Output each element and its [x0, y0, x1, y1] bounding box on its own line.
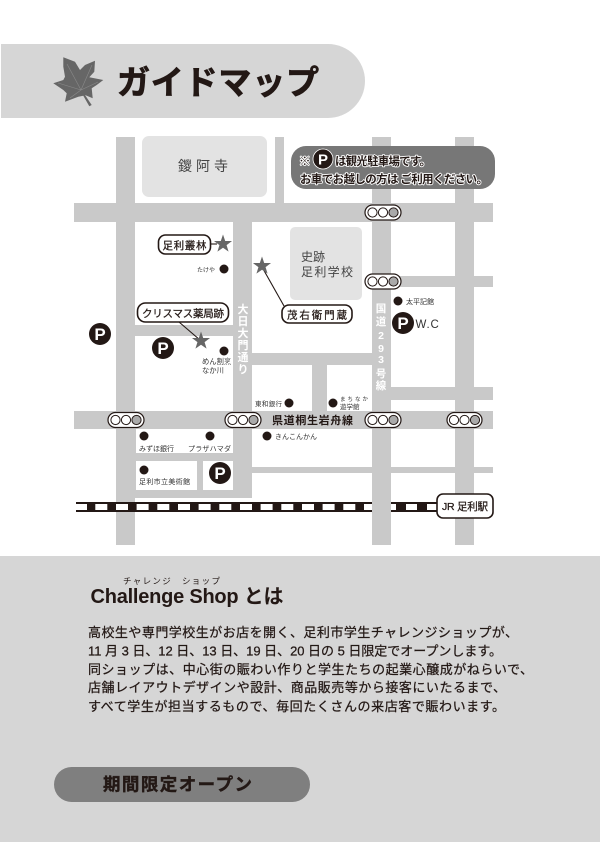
facility: Machinaka Yugakukan: [328, 396, 368, 411]
road label: Route 293: [376, 303, 387, 392]
bank: Mizuho: みずほ銀行: [139, 444, 174, 453]
title: ガイドマップ: [117, 64, 319, 101]
body text: 同ショップは、中心街の賑わい作りと学生たちの起業心醸成がねらいで、: [88, 662, 533, 677]
road label: Route 293: 道: [376, 315, 387, 328]
parking note: は観光駐車場です。: [335, 154, 431, 168]
station label: JR 足利駅: [442, 501, 488, 513]
landmark: Moemon-gura: 茂右衛門蔵: [287, 308, 348, 322]
road label: Daimon street: 日: [238, 315, 248, 328]
parking note: お車でお越しの方は ご利用ください。: [300, 172, 488, 186]
building: Bannaji temple: 鑁阿寺: [178, 158, 232, 174]
building: Ashikaga school: [290, 227, 362, 300]
facility: Machinaka Yugakukan: 遊学館: [340, 402, 360, 411]
road label: prefectural road: 県道桐生岩舟線: [272, 413, 353, 427]
shop: Kinkonkan: [262, 432, 317, 441]
shop: Takeya: たけや: [197, 266, 215, 274]
shop: Men Kappo Nakagawa: [202, 346, 231, 375]
shop: Taiheiki-kan: 太平記館: [406, 297, 434, 306]
road label: Daimon street: り: [238, 363, 248, 376]
panel: Challenge Shop: [0, 556, 600, 842]
road label: Route 293: 3: [378, 354, 384, 366]
body text: すべて学生が担当するもので、毎回たくさんの来店客で賑わいます。: [88, 699, 505, 714]
building: Ashikaga school: 史跡: [301, 249, 325, 264]
shop: Plaza Hamada: プラザハマダ: [188, 444, 231, 453]
parking and toilet: P: [397, 314, 409, 333]
parking note: [291, 146, 495, 189]
landmark: Christmas pharmacy: クリスマス薬局跡: [142, 307, 224, 320]
road label: Daimon street: 通: [238, 350, 248, 364]
section heading: Challenge Shop とは: [90, 586, 284, 608]
road label: Daimon street: 大: [238, 302, 248, 316]
bank: Towa: 東和銀行: [255, 399, 282, 408]
road label: Route 293: 2: [378, 330, 384, 342]
parking and toilet: [392, 312, 440, 334]
parking: [209, 462, 231, 484]
museum: 足利市立美術館: [139, 477, 190, 486]
landmark: Ashikaga Sorin: 足利叢林: [162, 239, 207, 252]
parking and toilet: W.C: [416, 319, 440, 331]
parking: [89, 323, 111, 345]
bank: Towa: [255, 398, 294, 408]
building: Bannaji temple: [142, 136, 267, 197]
shop: Taiheiki-kan: [394, 296, 434, 306]
traffic signal: [365, 274, 401, 289]
traffic signal: [108, 412, 144, 428]
traffic signal: [365, 205, 401, 220]
parking: [152, 337, 174, 359]
body text: 高校生や専門学校生がお店を開く、足利市学生チャレンジショップが、: [88, 625, 518, 640]
limited time pill: [54, 767, 310, 802]
body text: 店舗レイアウトデザインや設計、商品販売等から接客にいたるまで、: [88, 680, 506, 695]
parking: P: [94, 325, 106, 344]
road label: Route 293: 号: [376, 368, 386, 380]
road label: Route 293: 線: [376, 379, 387, 392]
limited time pill: 期間限定オープン: [103, 774, 252, 794]
facility: Machinaka Yugakukan: まちなか: [340, 396, 368, 403]
body text: 11 月 3 日、12 日、13 日、19 日、20 日の 5 日限定でオープンします。: [88, 644, 502, 658]
body text: [88, 625, 533, 714]
road label: Route 293: 9: [378, 343, 384, 355]
shop: Men Kappo Nakagawa: なか川: [202, 366, 224, 375]
shop: Plaza Hamada: [188, 432, 231, 453]
landmark: Moemon-gura: [253, 257, 352, 323]
traffic signal: [365, 412, 401, 428]
shop: Takeya: [197, 264, 228, 274]
landmark: Christmas pharmacy: [138, 303, 228, 349]
landmark: Ashikaga Sorin: [158, 235, 232, 254]
bank: Mizuho: [139, 432, 174, 453]
road label: Daimon street: [238, 302, 248, 376]
road label: Route 293: 国: [376, 303, 386, 315]
railway: [76, 502, 438, 512]
shop: Men Kappo Nakagawa: めん割烹: [202, 357, 231, 366]
parking: P: [157, 339, 169, 358]
traffic signal: [225, 412, 261, 428]
icon: maple leaf: [53, 57, 103, 106]
building: Ashikaga school: 足利学校: [301, 264, 353, 279]
road label: Daimon street: 大: [238, 326, 248, 340]
traffic signal: [447, 412, 482, 428]
header banner: [1, 44, 365, 118]
road label: Daimon street: 門: [238, 339, 248, 352]
parking: P: [214, 464, 226, 483]
station label: [437, 494, 493, 518]
furigana: チャレンジ ショップ: [123, 576, 220, 586]
parking note: ※: [299, 156, 310, 168]
museum: [139, 466, 190, 486]
parking note: P: [318, 152, 328, 168]
road map: [74, 137, 493, 545]
shop: Kinkonkan: きんこんかん: [275, 433, 317, 441]
